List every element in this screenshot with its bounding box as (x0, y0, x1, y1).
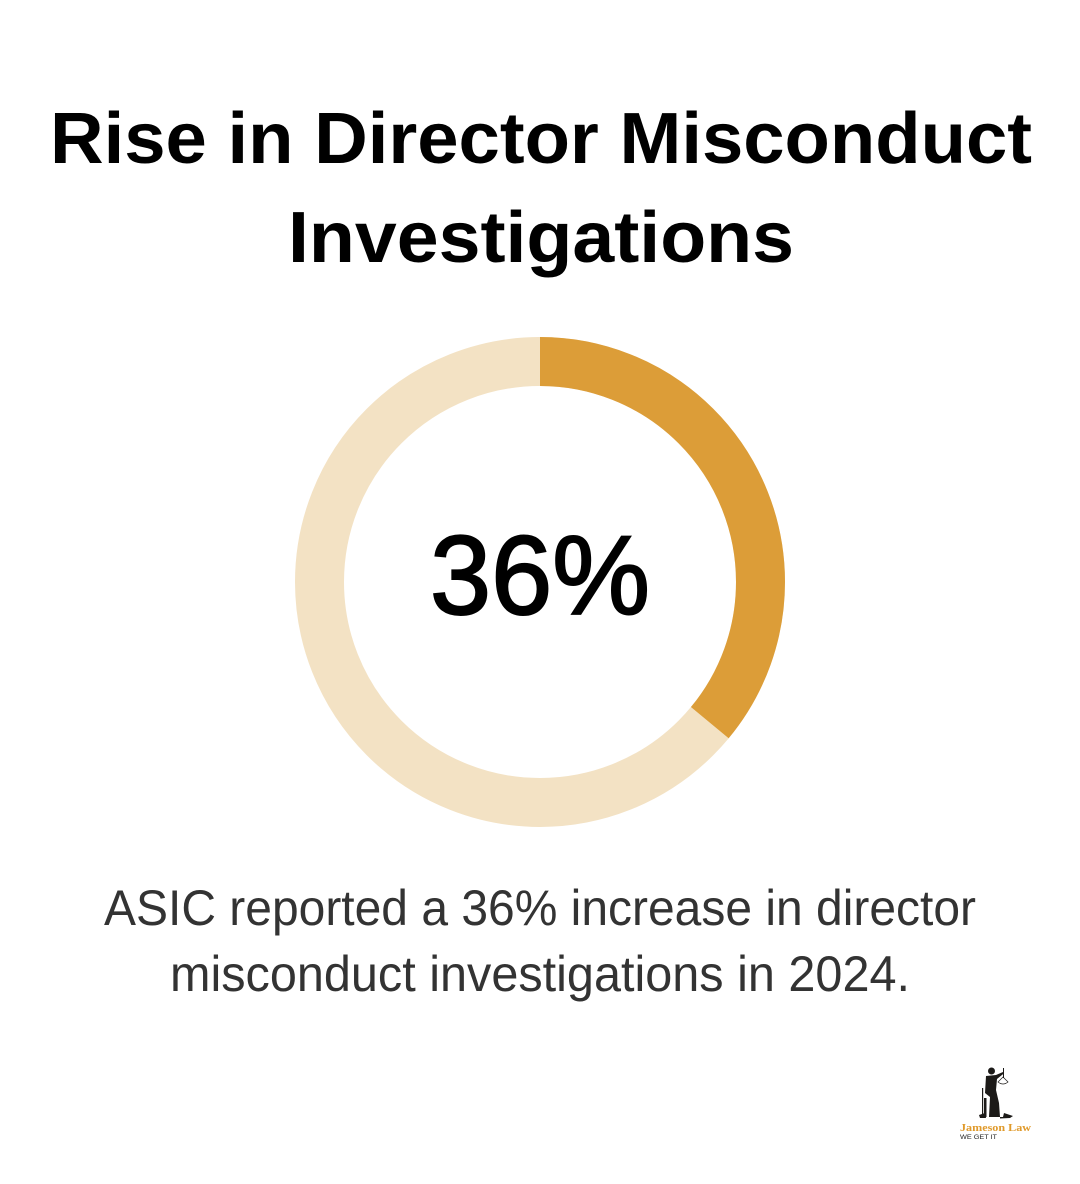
icon: lady justice (979, 1068, 1013, 1118)
title: Investigations (288, 198, 794, 278)
logo tagline: WE GET IT (960, 1134, 997, 1141)
title: Rise in Director Misconduct (50, 99, 1032, 179)
description text (104, 880, 976, 1002)
donut chart: 36% (320, 362, 760, 802)
logo wordmark: Jameson Law (960, 1123, 1031, 1134)
description text: misconduct investigations in 2024. (170, 946, 910, 1002)
description text: ASIC reported a 36% increase in director (104, 880, 976, 936)
logo: Jameson Law (960, 1068, 1031, 1141)
title (50, 99, 1032, 278)
donut value: 36% (430, 513, 650, 638)
